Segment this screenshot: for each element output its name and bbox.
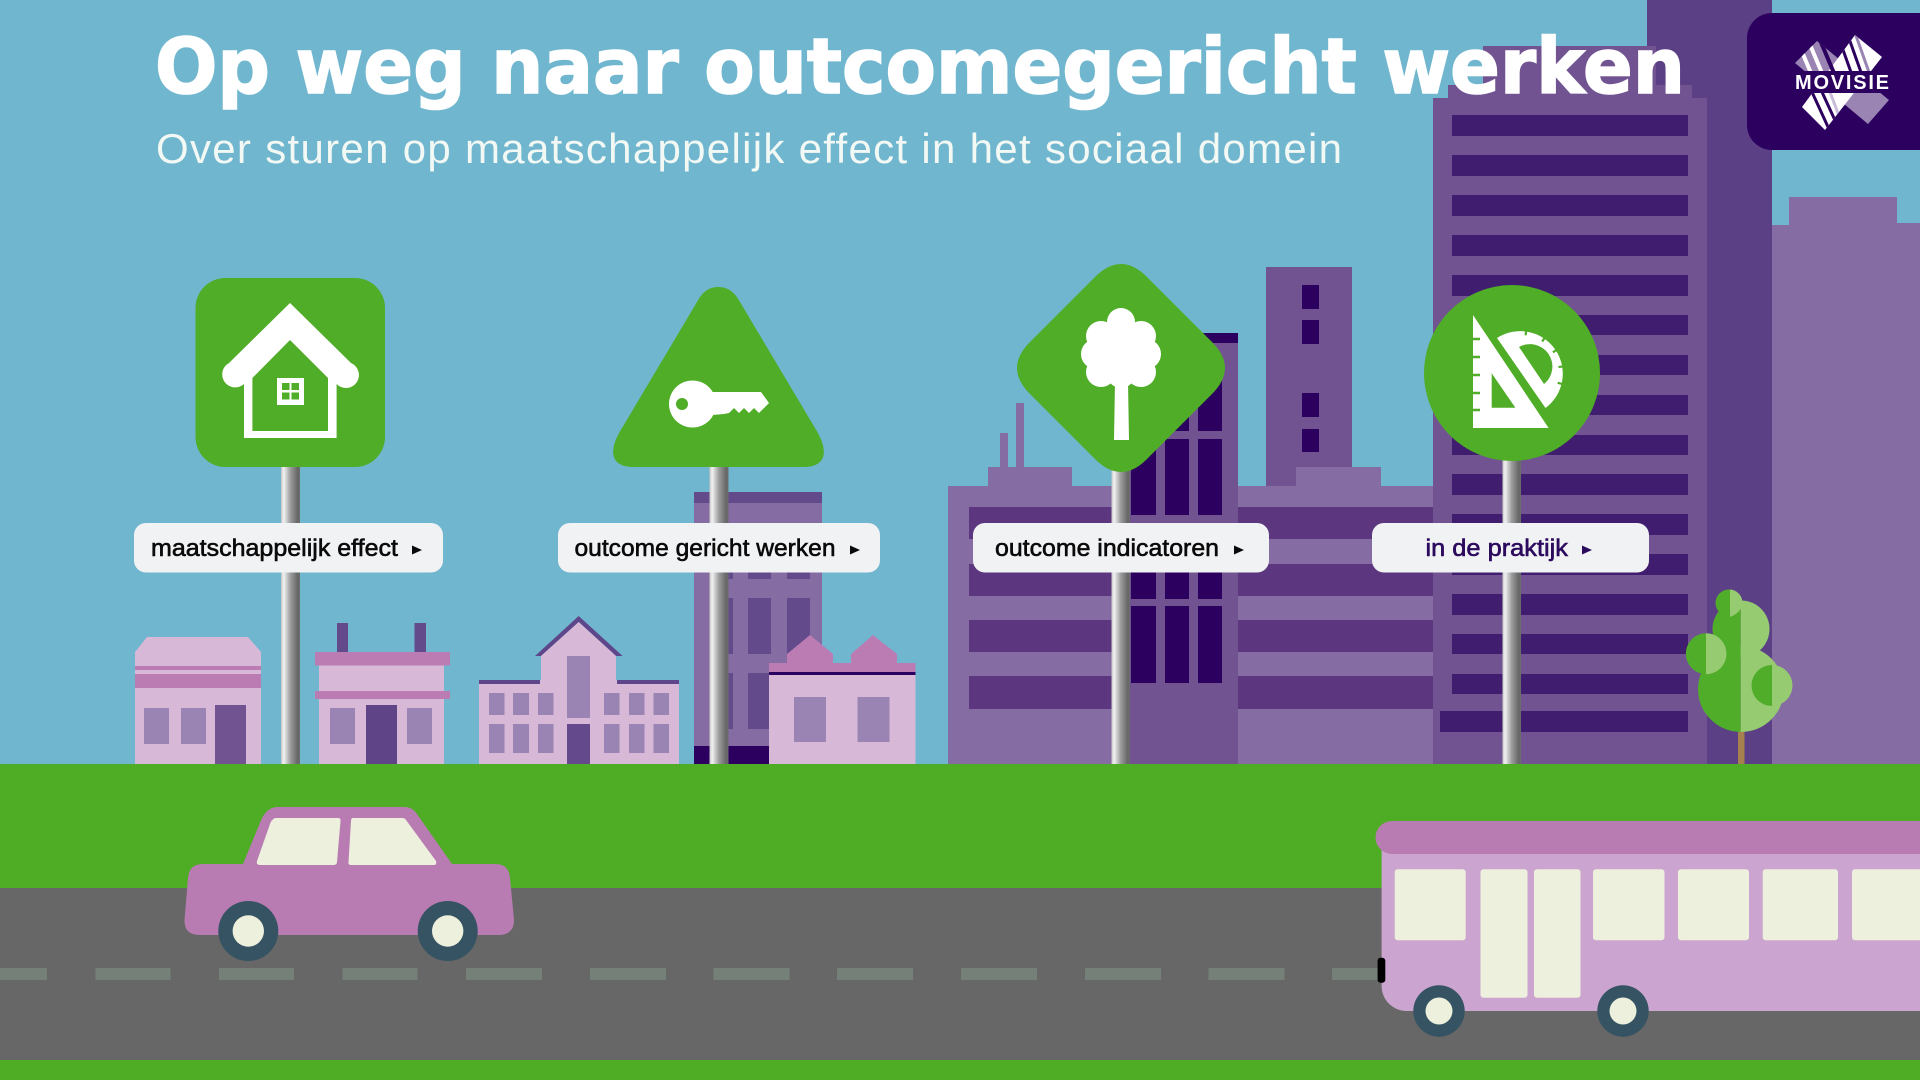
tree <box>1686 590 1792 764</box>
logo: Movisie <box>1747 13 1920 150</box>
skyline: low office building with stripes <box>948 403 1438 764</box>
skyline: small tower with windows <box>1266 267 1352 492</box>
bus bumper <box>1378 958 1385 983</box>
car <box>184 807 514 961</box>
icon: house <box>222 303 359 438</box>
grass <box>0 764 1920 1080</box>
label: maatschappelijk effect <box>134 523 443 572</box>
bus windows <box>1395 869 1920 998</box>
house 2 <box>315 623 450 764</box>
icon: protractor <box>1497 330 1564 408</box>
road <box>0 888 1920 1060</box>
icon: tree <box>1081 308 1161 440</box>
label: outcome gericht werken <box>558 523 880 572</box>
pink building in front of pole <box>769 635 916 764</box>
logo: Movisie: MOVISIE <box>1795 72 1889 94</box>
skyline: dark window building <box>1122 333 1238 764</box>
icon: key <box>669 380 769 428</box>
skyline: back tower <box>1647 0 1772 764</box>
sign 2: rounded triangle with key icon <box>613 287 824 467</box>
road markings <box>0 968 1408 980</box>
label: outcome gericht werken: outcome gericht werken <box>574 535 836 562</box>
sign 1: rounded square with house icon <box>196 278 385 467</box>
title: Op weg naar outcomegericht werken <box>155 23 1685 112</box>
car wheels <box>218 901 478 961</box>
sign 3: rounded diamond with tree icon <box>1017 264 1225 472</box>
skyline: purple building behind second sign <box>694 492 822 764</box>
skyline: right building <box>1772 197 1920 764</box>
subtitle: Over sturen op maatschappelijk effect in het sociaal domein <box>156 125 1342 172</box>
skyline: main tower with stripes <box>1433 46 1707 764</box>
label: maatschappelijk effect: maatschappelijk effect <box>151 535 398 562</box>
label: in de praktijk <box>1372 523 1649 572</box>
school building <box>479 616 679 764</box>
sign 4: circle with ruler and protractor icon <box>1424 285 1600 461</box>
bus <box>1376 821 1920 1037</box>
label: outcome indicatoren: outcome indicatoren <box>995 535 1219 562</box>
signpost poles <box>281 450 1521 764</box>
icon: set square <box>1473 315 1549 428</box>
label: outcome indicatoren <box>973 523 1269 572</box>
bus wheels <box>1413 985 1649 1037</box>
label: in de praktijk: in de praktijk <box>1426 535 1569 562</box>
house 1 <box>135 637 261 764</box>
